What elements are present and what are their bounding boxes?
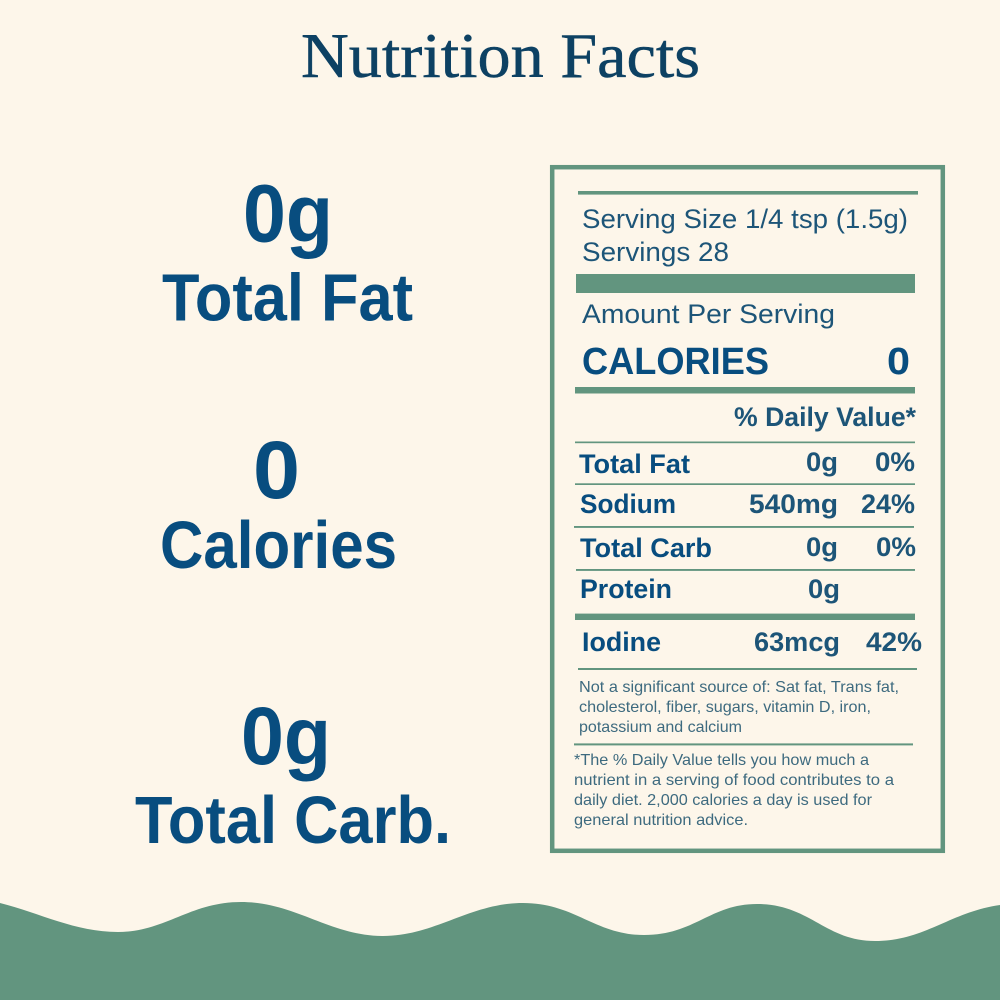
stat: calories: 0 (253, 425, 300, 516)
row: total fat: 0g (806, 447, 838, 477)
row: total carb: Total Carb (580, 533, 712, 563)
stat: total carb: 0g (241, 691, 331, 782)
note: not a significant source: potassium and calcium (579, 719, 742, 736)
calories block: CALORIES (582, 341, 769, 383)
row: sodium (575, 483, 915, 519)
footnote: daily value: *The % Daily Value tells you how much a (574, 752, 869, 769)
row: iodine: Iodine (582, 627, 661, 657)
row: sodium: 540mg (749, 489, 838, 519)
row: protein (576, 569, 915, 604)
footnote: daily value: nutrient in a serving of food contributes to a (574, 772, 894, 789)
row: total fat (575, 442, 915, 479)
row: sodium: 24% (861, 489, 915, 519)
footnote: daily value (574, 743, 913, 829)
panel: nutrition label (552, 167, 943, 851)
stat: total fat (162, 168, 413, 336)
stat: total fat: Total Fat (162, 260, 413, 336)
calories block: 0 (887, 341, 910, 383)
calories block (575, 299, 915, 394)
row: iodine: 63mcg (754, 627, 840, 657)
row: protein: 0g (808, 574, 840, 604)
serving info: Servings 28 (582, 237, 729, 267)
stat: total carb: Total Carb. (135, 783, 451, 858)
title: Nutrition Facts (301, 21, 700, 91)
note: not a significant source (578, 668, 917, 736)
wave footer (0, 902, 1000, 1000)
row: total carb: 0% (876, 532, 916, 562)
stat: total fat: 0g (243, 168, 333, 260)
serving info: Serving Size 1/4 tsp (1.5g) (582, 204, 908, 234)
stat: calories: Calories (160, 508, 397, 583)
note: not a significant source: Not a significant source of: Sat fat, Trans fat, (579, 679, 899, 696)
stat: calories (160, 425, 397, 583)
row: total carb (574, 526, 916, 563)
calories block: Amount Per Serving (582, 299, 835, 329)
serving info (576, 191, 918, 293)
stat: total carb (135, 691, 451, 858)
row: iodine: 42% (866, 627, 922, 657)
daily value header: % Daily Value* (734, 402, 916, 432)
row: protein: Protein (580, 574, 672, 604)
row: iodine (575, 614, 922, 657)
row: total carb: 0g (806, 532, 838, 562)
row: total fat: Total Fat (579, 449, 690, 479)
footnote: daily value: general nutrition advice. (574, 812, 748, 829)
row: sodium: Sodium (580, 489, 676, 519)
row: total fat: 0% (875, 447, 915, 477)
footnote: daily value: daily diet. 2,000 calories a day is used for (574, 792, 873, 809)
note: not a significant source: cholesterol, fiber, sugars, vitamin D, iron, (579, 699, 871, 716)
panel border (552, 167, 943, 851)
